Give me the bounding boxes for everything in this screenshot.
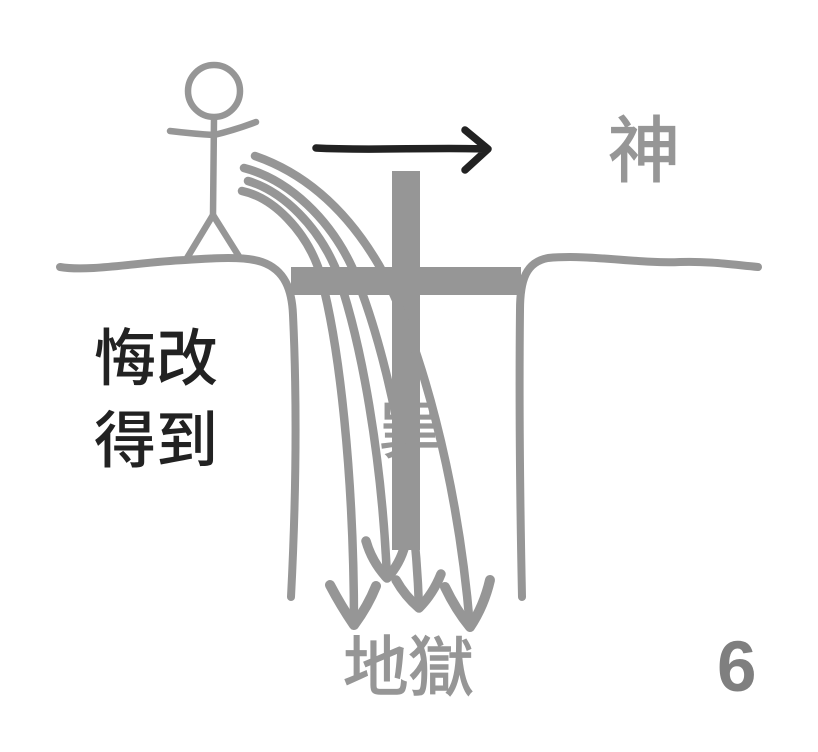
arrow: falling 4: [242, 191, 376, 625]
arrow: falling 1: [255, 156, 490, 627]
ground left and pit wall: [60, 258, 295, 597]
arrow: toward God: [316, 130, 488, 170]
heading: receive: 得到: [94, 407, 218, 476]
arrow: falling 2: [244, 168, 441, 608]
heading: repentance: 悔改: [94, 325, 218, 394]
page number: 6: [717, 628, 756, 707]
cross: [291, 171, 521, 550]
falling arrows: [242, 156, 490, 627]
stick figure: [170, 65, 256, 258]
arrow: falling 3: [248, 181, 405, 578]
label: hell: 地獄: [343, 631, 474, 704]
label: sin: 罪: [379, 397, 440, 465]
label: God: 神: [608, 112, 680, 192]
ground right and pit wall: [520, 257, 758, 597]
